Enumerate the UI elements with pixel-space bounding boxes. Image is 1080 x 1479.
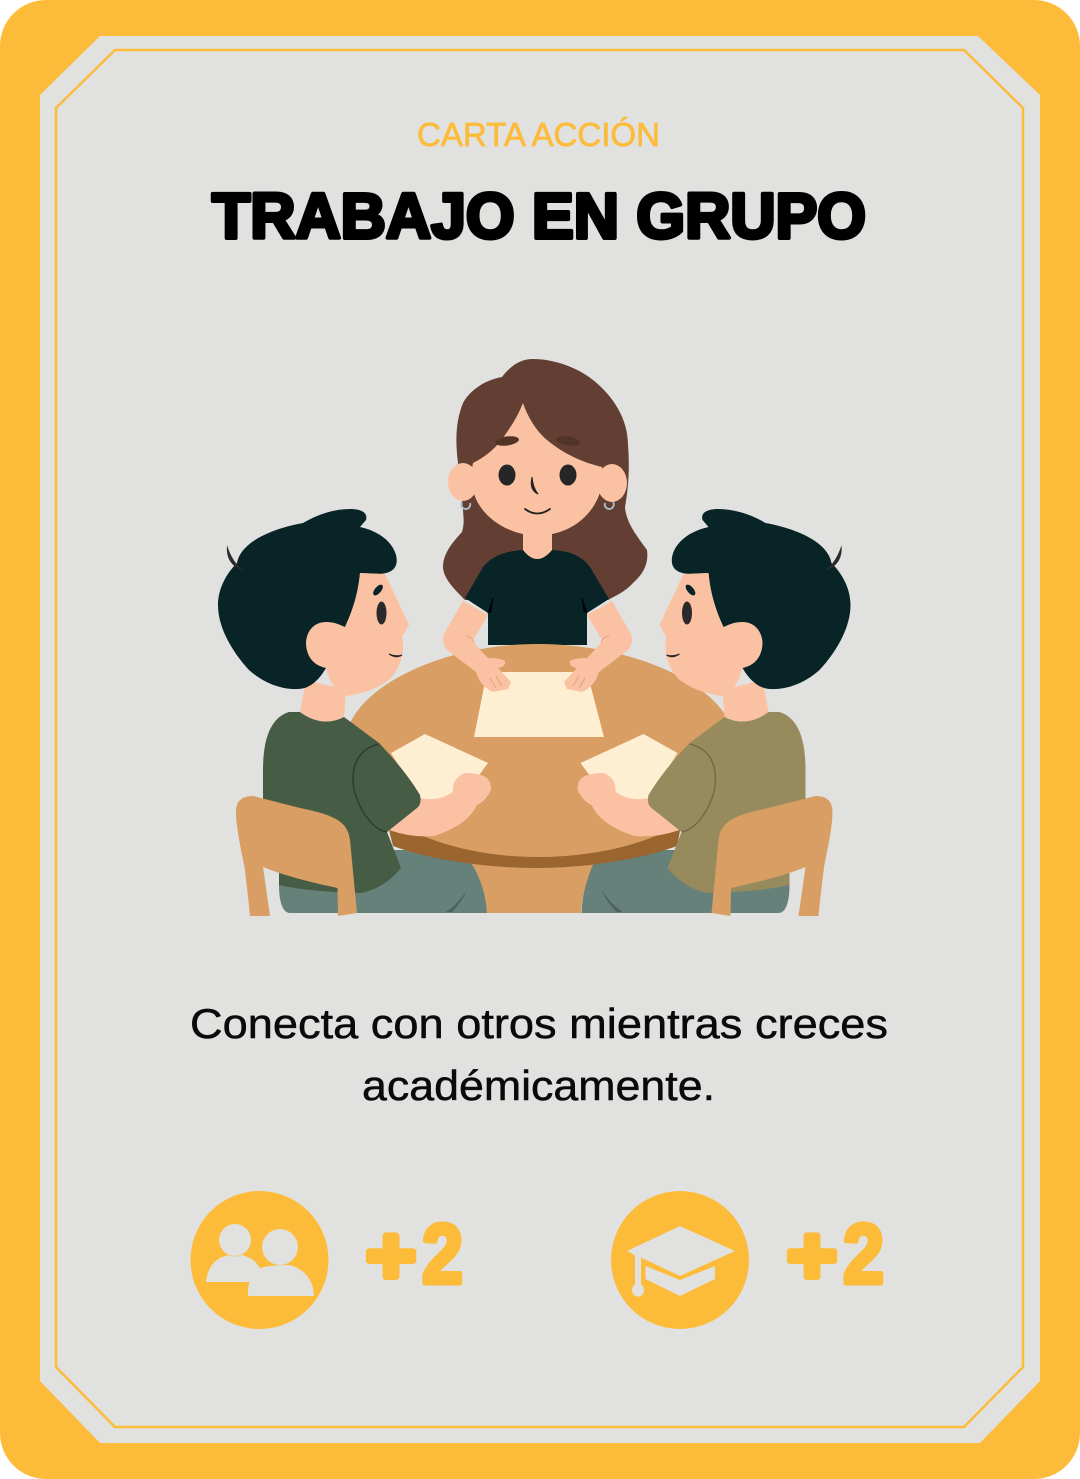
score: people +2: + xyxy=(366,1211,416,1300)
center paper xyxy=(474,672,604,737)
illustration: group around table xyxy=(218,359,850,916)
label: carta acción: CARTA ACCIÓN xyxy=(417,116,660,153)
left boy xyxy=(218,509,491,916)
icon: people xyxy=(190,1191,328,1329)
score: people +2 xyxy=(366,1207,463,1301)
title: TRABAJO EN GRUPO xyxy=(212,180,866,252)
right boy xyxy=(578,509,850,916)
girl face and arms xyxy=(443,403,632,692)
girl hair and shirt xyxy=(443,359,647,645)
icon: graduation cap xyxy=(611,1191,749,1329)
score: academics +2: + xyxy=(787,1211,837,1300)
description text: Conecta con otros mientras creces xyxy=(190,1000,888,1047)
description text xyxy=(190,1000,888,1109)
score: academics +2 xyxy=(787,1207,884,1301)
score: people +2: 2 xyxy=(422,1207,463,1301)
left boy trousers xyxy=(279,850,487,913)
description text: académicamente. xyxy=(362,1062,715,1109)
score: academics +2: 2 xyxy=(843,1207,884,1301)
table leg xyxy=(469,860,595,913)
right boy trousers xyxy=(582,850,790,913)
table xyxy=(345,644,735,868)
